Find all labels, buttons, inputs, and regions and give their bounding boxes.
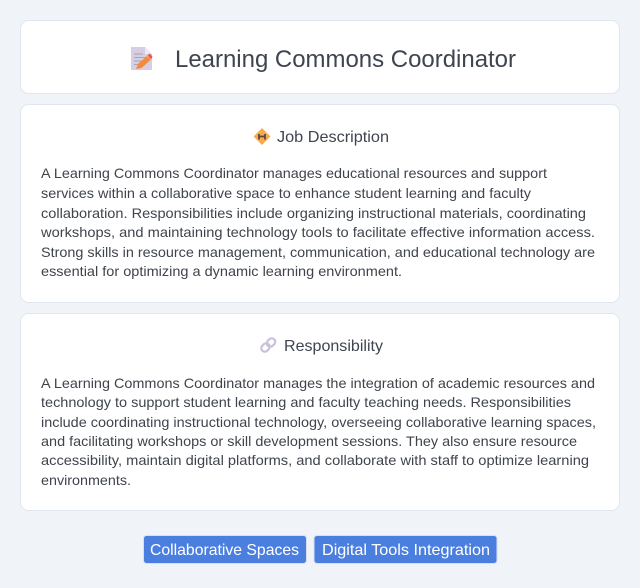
text block: responsibility: A Learning Commons Coordinator manages the integration of academic resources and <box>41 375 595 391</box>
text block: job description: services within a collaborative space to enhance student learning and faculty <box>41 185 531 201</box>
icon: orange diamond sign <box>254 128 270 145</box>
text block: responsibility: accessibility, maintain digital platforms, and collaborate with staff to optimize learning <box>41 452 589 468</box>
text block: responsibility: environments. <box>41 472 131 488</box>
text block: job description: essential for optimizing a dynamic learning environment. <box>41 263 402 279</box>
panel: title header <box>20 20 620 94</box>
heading: responsibility: Responsibility <box>284 338 383 355</box>
text block: responsibility: and facilitating workshops or skill development sessions. They also ensure resource <box>41 433 577 449</box>
tag: collaborative spaces <box>144 536 306 564</box>
text block: job description: collaboration. Responsibilities include organizing instructional materials, coordinating <box>41 205 586 221</box>
text block: responsibility <box>41 375 596 488</box>
icon: chain link <box>260 337 277 353</box>
tag: collaborative spaces: Collaborative Spaces <box>150 542 299 559</box>
title: Learning Commons Coordinator <box>175 46 516 73</box>
tag: digital tools integration: Digital Tools Integration <box>322 542 490 559</box>
heading: job description: Job Description <box>277 129 389 146</box>
text block: responsibility: technology to support student learning and faculty teaching needs. Responsibilities <box>41 394 571 410</box>
panel: responsibility <box>20 314 620 510</box>
text block: responsibility: include coordinating instructional technology, overseeing collaborative learning spaces, <box>41 414 596 430</box>
text block: job description: A Learning Commons Coordinator manages educational resources and support <box>41 165 547 181</box>
text block: job description: Strong skills in resource management, communication, and educational technology are <box>41 244 595 260</box>
icon: document with pencil <box>131 47 152 70</box>
text block: job description: workshops, and maintaining technology tools to facilitate effective information access. <box>40 224 595 240</box>
panel: job description <box>20 104 620 302</box>
text block: job description <box>40 165 595 279</box>
tag: digital tools integration <box>314 536 497 564</box>
